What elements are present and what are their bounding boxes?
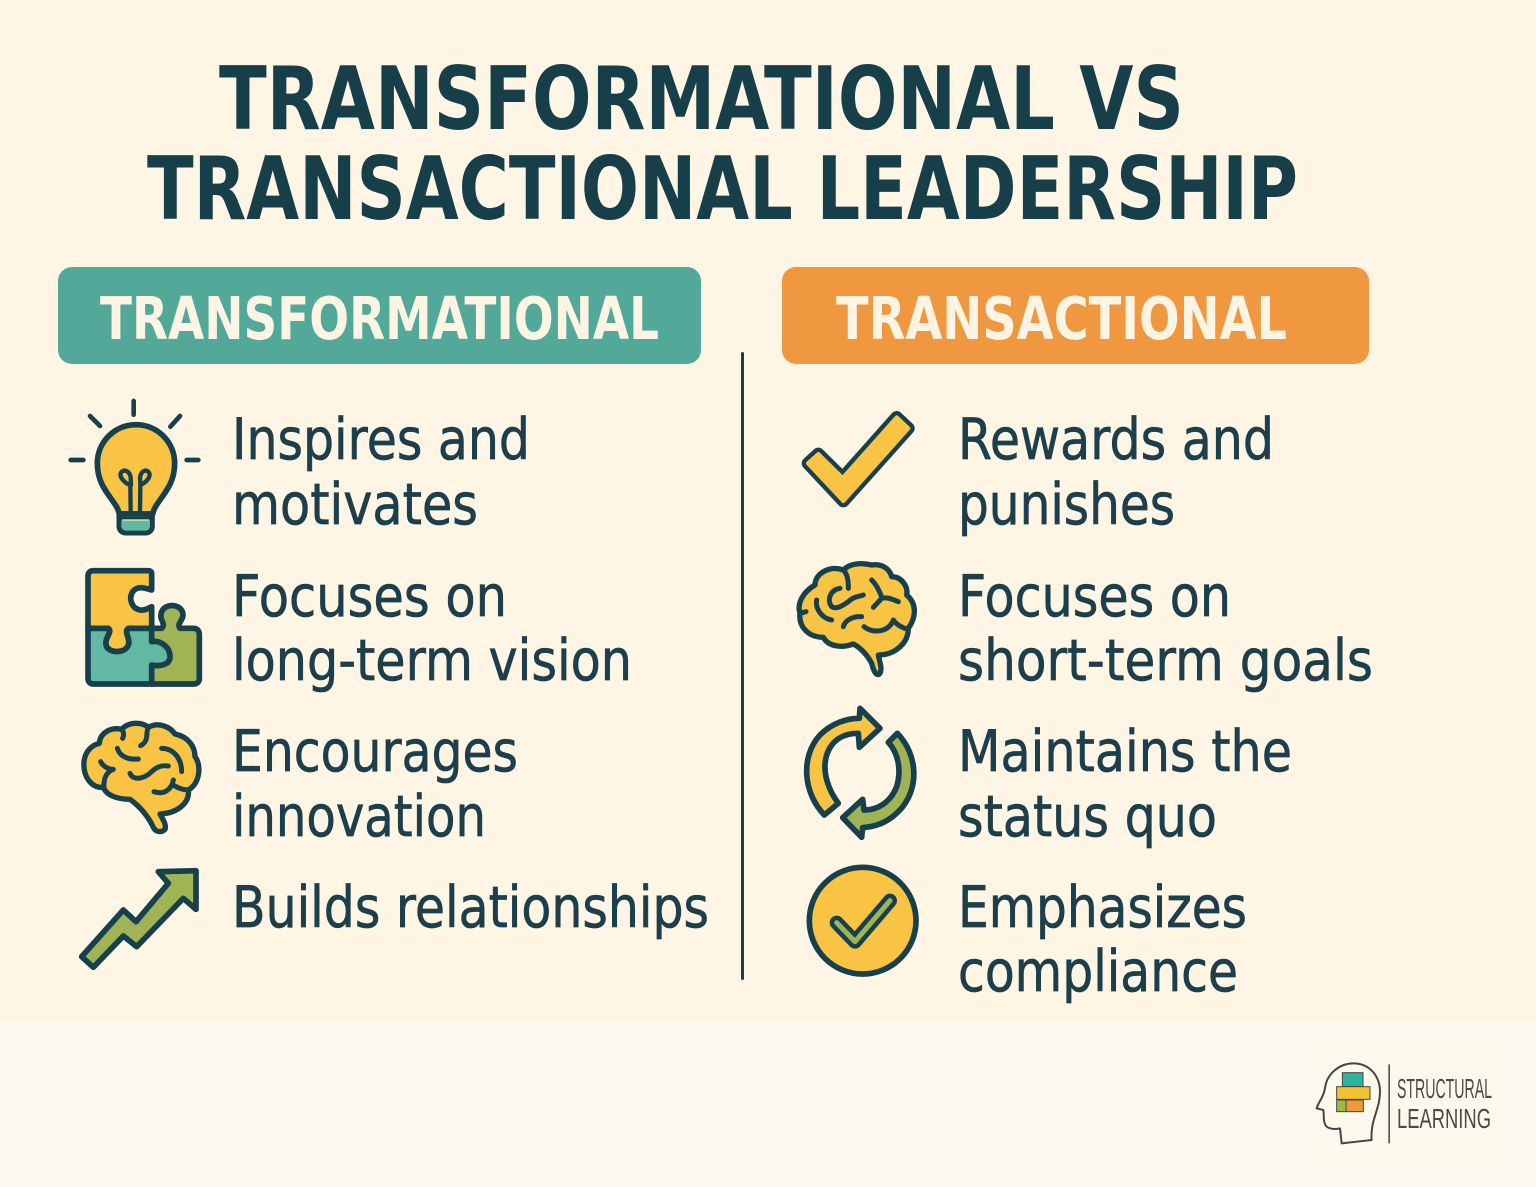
text: encourages innovation: innovation (232, 784, 486, 850)
logo wordmark (1397, 1073, 1492, 1134)
icon: rising arrow (82, 871, 196, 967)
text: focuses on short-term goals (958, 564, 1373, 694)
text: emphasizes compliance (958, 875, 1247, 1005)
logo wordmark: LEARNING (1397, 1103, 1491, 1134)
text: maintains the status quo: status quo (958, 784, 1217, 850)
icon: brain (799, 564, 914, 675)
text: inspires and motivates: motivates (232, 472, 478, 538)
text: focuses on long-term vision: long-term vision (232, 628, 632, 694)
heading: transformational (58, 267, 701, 364)
icon: cycle arrows (807, 708, 914, 837)
text: inspires and motivates: Inspires and (232, 407, 530, 473)
text: focuses on short-term goals: short-term goals (958, 628, 1373, 694)
panel: transformational (58, 267, 709, 967)
text: emphasizes compliance: compliance (958, 939, 1238, 1005)
text: encourages innovation (232, 719, 518, 850)
text: maintains the status quo: Maintains the (958, 719, 1292, 785)
text: rewards and punishes (958, 407, 1274, 538)
title: TRANSFORMATIONAL VS (219, 48, 1184, 150)
text: encourages innovation: Encourages (232, 719, 518, 785)
icon: check mark (808, 417, 908, 501)
icon: light bulb (71, 401, 198, 533)
title (147, 48, 1298, 240)
icon: puzzle pieces (88, 571, 199, 684)
divider (741, 352, 744, 980)
text: rewards and punishes: punishes (958, 472, 1175, 538)
icon: brain (84, 723, 199, 832)
icon: check in circle (809, 867, 916, 974)
text: maintains the status quo (958, 719, 1292, 850)
text: rewards and punishes: Rewards and (958, 407, 1274, 473)
heading: transactional: TRANSACTIONAL (836, 284, 1287, 353)
text: focuses on long-term vision (232, 564, 632, 694)
text: inspires and motivates (232, 407, 530, 538)
heading: transformational: TRANSFORMATIONAL (100, 284, 659, 353)
icon: head with blocks (1317, 1063, 1390, 1143)
text: builds relationships: Builds relationships (232, 875, 709, 941)
text: focuses on long-term vision: Focuses on (232, 564, 507, 630)
panel: transactional (782, 267, 1373, 1005)
text: focuses on short-term goals: Focuses on (958, 564, 1231, 630)
text: emphasizes compliance: Emphasizes (958, 875, 1247, 941)
logo: structural learning (1306, 1040, 1506, 1170)
heading: transactional (782, 267, 1369, 364)
